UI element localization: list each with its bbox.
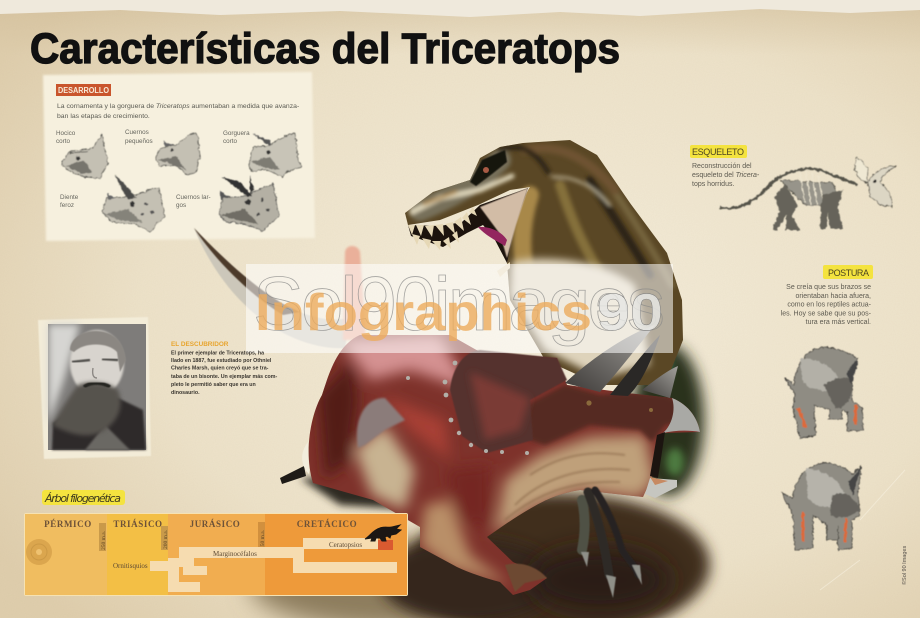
horns <box>565 325 678 398</box>
icon: skull stage 4 <box>102 175 165 232</box>
icon: posture sketch sprawling <box>785 347 863 438</box>
text: postura: les. Hoy se sabe que su pos- <box>781 310 872 318</box>
watermark: Infographics <box>255 284 592 342</box>
text: postura: tura era más vertical. <box>806 319 871 326</box>
text: el descubridor: taba de un bisonte. Un ejemplar más com- <box>171 374 277 380</box>
rex claws <box>581 490 642 598</box>
icon: posture sketch upright <box>782 463 861 550</box>
labels: growth stages: Cuernos lar- <box>176 194 211 201</box>
icon: skull stage 5 <box>219 176 279 231</box>
frill spikes <box>406 361 529 455</box>
heading: arbol filogenetico: Árbol filogenética <box>44 492 121 505</box>
heading: esqueleto: ESQUELETO <box>692 147 744 157</box>
period labels <box>44 519 357 529</box>
body <box>308 335 700 595</box>
heading: postura <box>823 265 873 279</box>
period labels: CRETÁCICO <box>297 519 357 529</box>
text: el descubridor: El primer ejemplar de Triceratops, ha <box>171 350 264 356</box>
labels: growth stages: pequeños <box>125 138 153 145</box>
watermark: Sol90images <box>253 262 665 347</box>
panel: photo of discoverer <box>38 317 151 459</box>
time markers <box>99 522 266 551</box>
chart: phylogenetic timeline <box>24 513 408 596</box>
head <box>527 385 690 445</box>
illustration: triceratops <box>194 228 705 605</box>
rear foot <box>505 564 547 592</box>
text: postura: Se creía que sus brazos se <box>786 284 871 291</box>
labels: growth stages: gos <box>176 202 186 209</box>
beak <box>663 398 700 433</box>
section: esqueleto <box>690 145 897 230</box>
branch labels: Marginocéfalos <box>213 550 257 558</box>
labels: growth stages: Gorguera <box>223 130 250 137</box>
icon: skull stage 1 <box>62 135 108 178</box>
watermark: 90 <box>597 284 663 342</box>
labels: growth stages: corto <box>56 138 70 145</box>
period labels: JURÁSICO <box>190 519 240 529</box>
time markers: 250 m.a. <box>101 530 107 550</box>
marker: red block <box>378 540 393 550</box>
text: el descubridor <box>171 341 277 396</box>
frill <box>450 350 567 453</box>
text: el descubridor: pleto le permitió saber que era un <box>171 382 256 388</box>
heading: postura: POSTURA <box>828 268 869 278</box>
heading: desarrollo <box>56 84 111 96</box>
text: postura: orientaban hacia afuera, <box>796 293 871 300</box>
rex body and neck <box>400 135 690 390</box>
mouth and jaw <box>645 432 677 498</box>
rex eye <box>483 167 489 173</box>
labels: growth stages: corto <box>223 138 237 145</box>
icon: skull stage 2 <box>156 133 200 175</box>
labels: growth stages: Diente <box>60 194 79 201</box>
text: esqueleto: tops horridus. <box>692 181 734 188</box>
text: el descubridor: llado en 1887, fue estudiado por Othniel <box>171 358 272 364</box>
text: esqueleto: esqueleto del Tricera- <box>692 172 759 179</box>
period labels: PÉRMICO <box>44 519 92 529</box>
icon: skeleton <box>720 157 897 230</box>
icon: origin circle <box>26 539 52 565</box>
text: esqueleto: Reconstrucción del <box>692 163 752 170</box>
panel: desarrollo <box>43 72 315 241</box>
icon: skull stage 3 <box>249 133 302 177</box>
tail <box>194 228 350 348</box>
heading: desarrollo: DESARROLLO <box>58 86 109 95</box>
shoulder plate <box>357 398 405 448</box>
text: el descubridor: Charles Marsh, quien creyó que se tra- <box>171 366 269 372</box>
time markers: 150 m.a. <box>260 529 266 549</box>
labels: growth stages: Hocico <box>56 130 76 137</box>
labels: growth stages: Cuernos <box>125 129 149 136</box>
title: Características del Triceratops <box>30 25 620 73</box>
tree branches <box>150 538 397 592</box>
text: desarrollo intro: La cornamenta y la gorguera de Triceratops aumentaban a medida que avanza- <box>57 103 299 110</box>
rex mouth <box>408 188 528 263</box>
portrait <box>48 324 146 450</box>
icon: triceratops silhouette <box>365 525 401 541</box>
labels: growth stages: feroz <box>60 202 74 209</box>
text: el descubridor: EL DESCUBRIDOR <box>171 341 229 348</box>
credit: ©Sol 90 Images <box>901 546 908 585</box>
section: postura <box>781 265 873 550</box>
tail stump <box>280 466 306 484</box>
branch labels: Ornitisquios <box>113 562 148 570</box>
time markers: 200 m.a. <box>163 529 169 549</box>
text: desarrollo intro: ban las etapas de crecimiento. <box>57 113 150 120</box>
eyes <box>586 400 653 412</box>
branch labels <box>113 541 362 570</box>
period bands <box>25 514 407 595</box>
text: el descubridor: dinosaurio. <box>171 390 200 396</box>
rex teeth <box>408 207 510 277</box>
text: postura: como en los reptiles actua- <box>787 302 872 308</box>
period labels: TRIÁSICO <box>113 519 163 529</box>
raised limb <box>343 246 366 340</box>
illustration: tyrannosaurus <box>400 135 690 390</box>
branch labels: Ceratopsios <box>329 541 362 549</box>
ground and shadow <box>250 344 710 618</box>
